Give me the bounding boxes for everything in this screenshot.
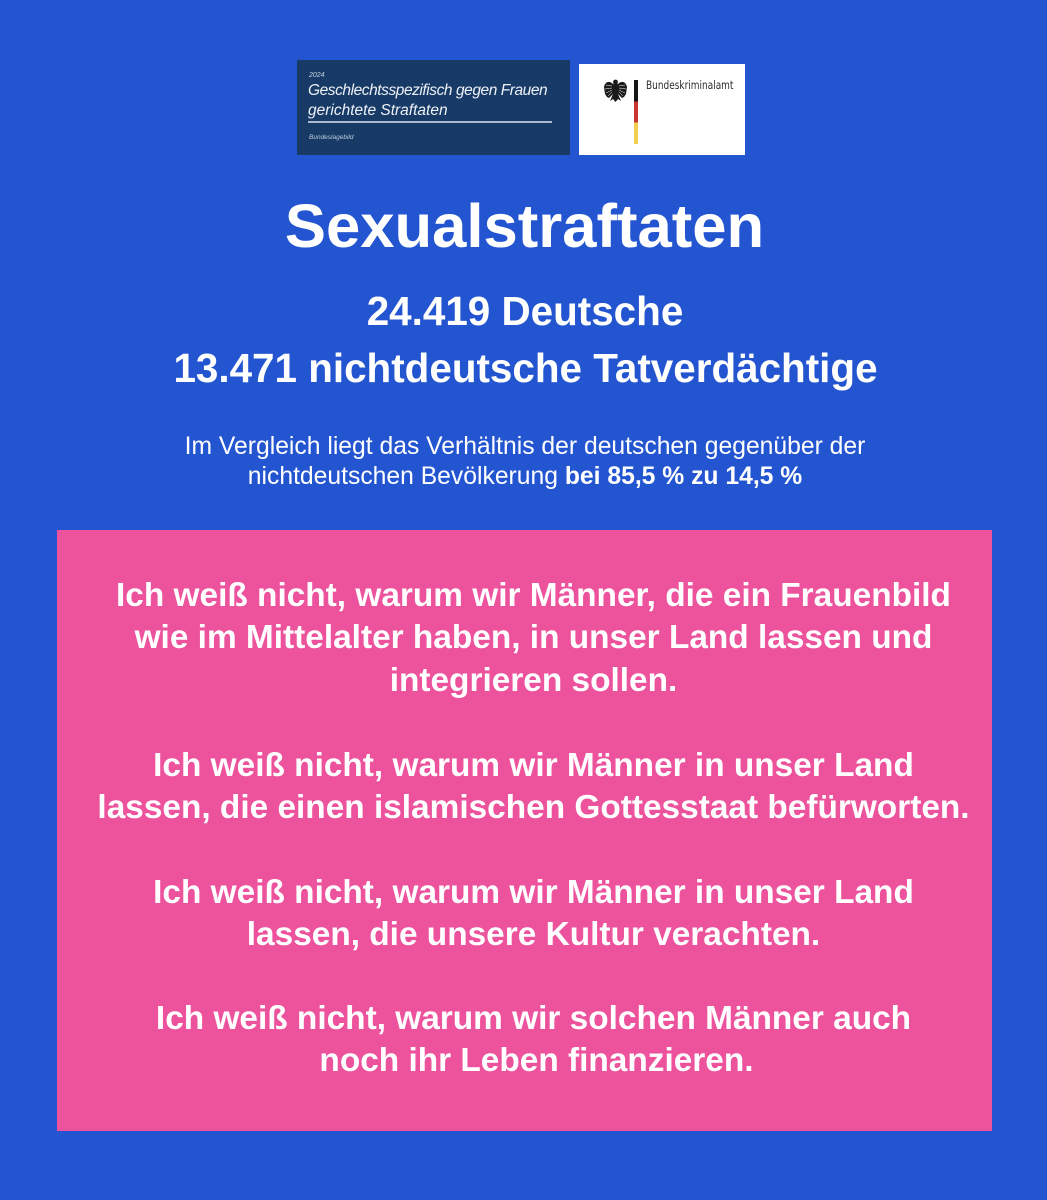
- main title: Sexualstraftaten: [285, 192, 764, 261]
- German flag stripe: [634, 80, 638, 144]
- statement 3: Ich weiß nicht, warum wir Männer in unser Land: [153, 874, 914, 911]
- population comparison text: nichtdeutschen Bevölkerung bei 85,5 % zu 14,5 %: [248, 463, 802, 490]
- statement 4: Ich weiß nicht, warum wir solchen Männer auch: [156, 1000, 911, 1037]
- panel: pink statement box: [57, 530, 992, 1131]
- logo wordmark: Bundeskriminalamt: [646, 78, 733, 92]
- population comparison text: [185, 433, 865, 490]
- icon: federal eagle: [604, 80, 627, 102]
- statement 2: lassen, die einen islamischen Gottesstaat befürworten.: [97, 789, 970, 826]
- statement 3: [153, 874, 914, 953]
- statement 2: Ich weiß nicht, warum wir Männer in unser Land: [153, 747, 914, 784]
- cover title: Geschlechtsspezifisch gegen Frauen: [308, 82, 547, 99]
- cover title: [308, 82, 547, 119]
- statement 1: wie im Mittelalter haben, in unser Land lassen und: [135, 619, 932, 656]
- statement 3: lassen, die unsere Kultur verachten.: [247, 916, 820, 953]
- report cover thumbnail: [297, 60, 570, 155]
- cover title: gerichtete Straftaten: [308, 102, 448, 119]
- cover year: 2024: [309, 72, 325, 79]
- statement 2: [97, 747, 970, 826]
- cover rule: [308, 121, 552, 122]
- statement 1: integrieren sollen.: [390, 662, 677, 699]
- statement 4: noch ihr Leben finanzieren.: [319, 1042, 754, 1079]
- statement 1: [116, 577, 951, 699]
- population comparison text: Im Vergleich liegt das Verhältnis der deutschen gegenüber der: [185, 433, 865, 460]
- statement 4: [156, 1000, 911, 1079]
- suspect count: non-Germans: 13.471 nichtdeutsche Tatverdächtige: [173, 345, 878, 391]
- statement 1: Ich weiß nicht, warum wir Männer, die ein Frauenbild: [116, 577, 951, 614]
- cover subtitle: Bundeslagebild: [309, 134, 353, 141]
- suspect count: Germans: 24.419 Deutsche: [367, 288, 683, 334]
- Bundeskriminalamt logo panel: [579, 64, 745, 155]
